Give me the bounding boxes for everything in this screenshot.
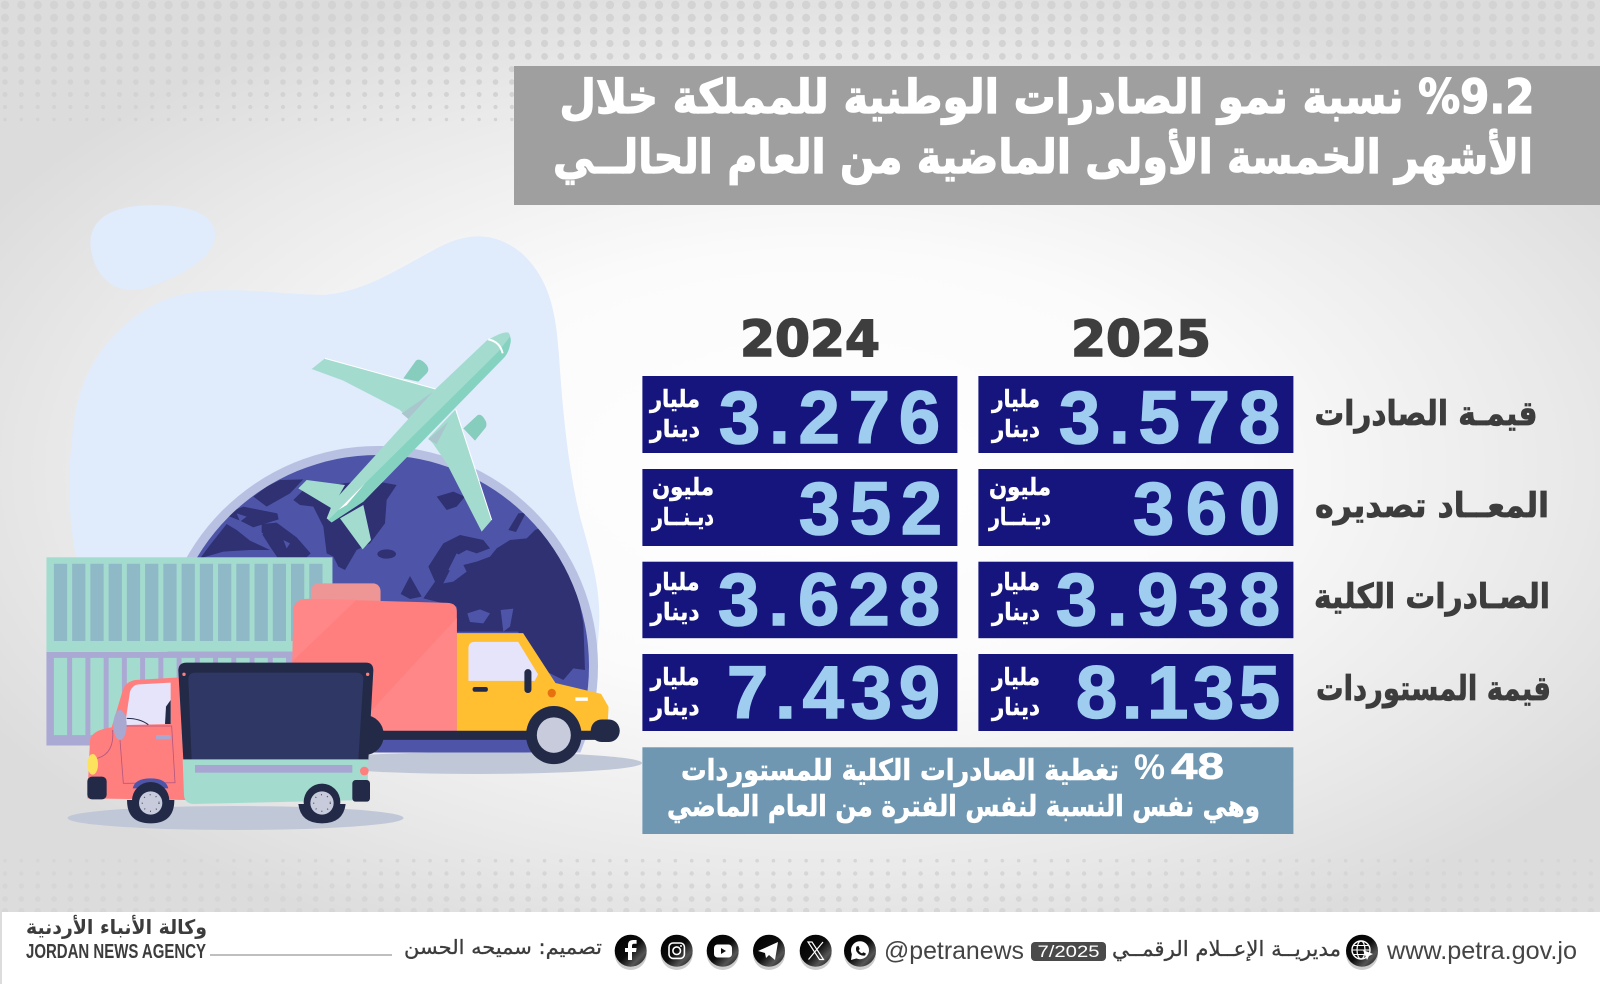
value 2025: ديـنــار <box>988 503 1051 531</box>
label: قيمـة الصادرات <box>1314 394 1538 434</box>
value 2025: مليار <box>991 663 1040 691</box>
value 2025: 3.938 <box>1056 558 1280 641</box>
icon: instagram <box>661 935 693 970</box>
value 2025: 3.578 <box>1059 376 1280 459</box>
value 2024 <box>642 651 957 734</box>
date badge <box>1031 942 1106 961</box>
value 2024: دينار <box>649 415 700 443</box>
airplane <box>298 332 511 549</box>
value 2025 <box>978 651 1293 734</box>
icon: x <box>800 935 832 970</box>
handle: petranews: @petranews <box>884 937 1024 965</box>
row: total exports <box>642 558 1550 641</box>
value 2025: مليار <box>991 568 1040 596</box>
icon: telegram <box>753 935 785 970</box>
value 2025: 360 <box>1133 467 1280 550</box>
blob: small <box>90 205 215 290</box>
truck: front cab <box>87 663 373 823</box>
note line 2: وهي نفس النسبة لنفس الفترة من العام الماضي <box>667 789 1260 823</box>
dot pattern: bottom <box>5 861 1600 911</box>
title banner <box>514 66 1600 205</box>
row: imports <box>642 651 1551 734</box>
value 2024: 3.276 <box>719 376 940 459</box>
globe <box>158 446 598 752</box>
row: re-exports <box>642 467 1549 550</box>
value 2025 <box>978 467 1293 550</box>
label: الصـادرات الكلية <box>1314 577 1550 617</box>
coverage figure: 48 <box>1171 746 1224 787</box>
ground shadow: front truck <box>68 806 404 830</box>
value 2024: مليار <box>650 663 700 691</box>
value 2024: مليون <box>652 473 714 501</box>
value 2024: دينار <box>650 693 700 721</box>
value 2025: مليون <box>989 473 1051 501</box>
icon: facebook <box>615 935 647 970</box>
value 2025: دينار <box>991 693 1040 721</box>
agency logo text <box>26 914 392 963</box>
container: stacked <box>46 557 332 746</box>
illustration: logistics <box>46 205 642 886</box>
department name: مديريــة الإعــلام الرقمــي <box>1112 937 1341 961</box>
label: قيمة المستوردات <box>1316 669 1551 709</box>
label: المعــاد تصديره <box>1315 486 1549 526</box>
column heading: 2024: 2024 <box>740 310 880 368</box>
row: export value <box>642 376 1538 459</box>
value 2024: ديـنــار <box>651 503 714 531</box>
percent sign: % <box>1134 748 1165 787</box>
value 2024: 352 <box>799 467 942 550</box>
agency logo text: وكالة الأنباء الأردنية <box>26 914 207 939</box>
note line 1: تغطية الصادرات الكلية للمستوردات <box>681 753 1119 787</box>
value 2025: 8.135 <box>1076 651 1280 734</box>
agency logo text: JORDAN NEWS AGENCY <box>26 941 206 963</box>
value 2024: دينار <box>650 598 700 626</box>
ground shadow: rear truck <box>312 752 642 774</box>
value 2025: دينار <box>991 415 1040 443</box>
footer <box>2 912 1600 984</box>
value 2024: 7.439 <box>727 651 940 734</box>
value 2025: دينار <box>991 598 1040 626</box>
value 2024 <box>642 467 957 550</box>
designer credit: تصميم: سميحه الحسن <box>404 935 602 959</box>
callout: coverage note <box>642 746 1293 834</box>
value 2025: مليار <box>991 385 1040 413</box>
truck: yellow delivery <box>292 583 620 764</box>
value 2024: مليار <box>649 385 700 413</box>
dot pattern: top <box>5 5 1600 120</box>
icon: whatsapp <box>844 935 876 970</box>
value 2024: 3.628 <box>718 558 940 641</box>
icon: youtube <box>707 935 739 970</box>
blob: large <box>69 236 599 722</box>
date badge: 7/2025 <box>1038 942 1100 961</box>
value 2024: مليار <box>650 568 700 596</box>
icon: website globe <box>1346 935 1378 970</box>
column heading: 2025: 2025 <box>1071 310 1211 368</box>
title line 1: %9.2 نسبة نمو الصادرات الوطنية للمملكة خلال <box>560 70 1534 125</box>
website url: www.petra.gov.jo <box>1386 937 1577 965</box>
